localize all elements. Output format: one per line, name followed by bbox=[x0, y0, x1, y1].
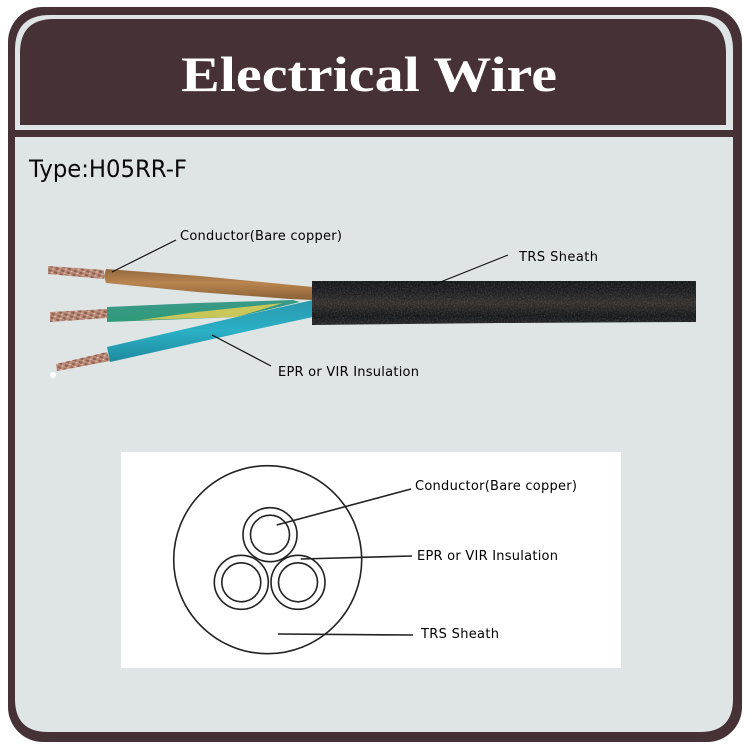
type label: Type:H05RR-F bbox=[28, 155, 187, 183]
title: Electrical Wire bbox=[181, 46, 557, 102]
label: insulation: EPR or VIR Insulation bbox=[278, 365, 419, 380]
leader lines: photo bbox=[112, 240, 508, 366]
header band bbox=[15, 15, 733, 130]
cable photo illustration bbox=[48, 266, 696, 378]
green-yellow wire bbox=[107, 300, 300, 322]
black sheath bbox=[312, 281, 696, 325]
diagram labels: Conductor(Bare copper) bbox=[415, 479, 577, 494]
core: top bbox=[243, 508, 297, 562]
content panel background bbox=[15, 137, 733, 732]
core: right bbox=[271, 555, 325, 609]
label: conductor: Conductor(Bare copper) bbox=[180, 229, 342, 244]
white speck at strand tip bbox=[50, 372, 56, 378]
cross-section diagram panel bbox=[121, 452, 621, 668]
leader lines: diagram bbox=[277, 489, 413, 635]
outer sheath circle bbox=[174, 466, 362, 654]
brown wire bbox=[104, 269, 313, 300]
photo labels bbox=[180, 229, 598, 380]
diagram labels: TRS Sheath bbox=[420, 627, 499, 642]
core: left bbox=[214, 555, 268, 609]
copper strand: bottom bbox=[56, 352, 110, 371]
blue wire bbox=[107, 300, 313, 362]
copper strand: top bbox=[48, 266, 104, 279]
diagram labels bbox=[415, 479, 577, 642]
copper strand: middle bbox=[50, 309, 107, 322]
diagram labels: EPR or VIR Insulation bbox=[417, 549, 558, 564]
label: TRS sheath: TRS Sheath bbox=[518, 250, 598, 265]
